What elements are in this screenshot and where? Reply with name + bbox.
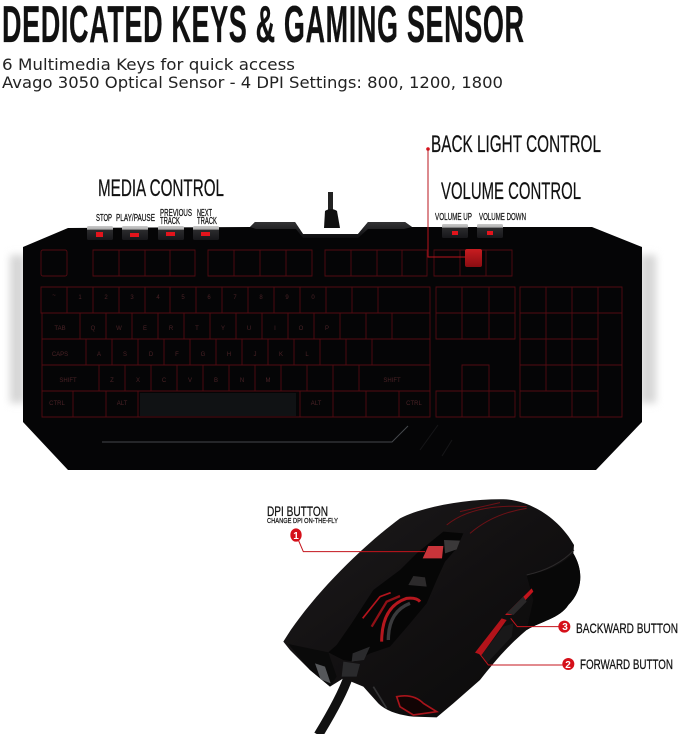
key legends: R bbox=[169, 326, 174, 332]
key legends: 6 bbox=[207, 295, 211, 301]
key legends: CTRL bbox=[49, 401, 65, 407]
key legends: SHIFT bbox=[383, 378, 401, 384]
key legends bbox=[49, 293, 422, 407]
key legends: SHIFT bbox=[59, 378, 77, 384]
callout numbers: 1 bbox=[293, 531, 299, 542]
key legends: Y bbox=[221, 326, 225, 332]
heading: volume control: VOLUME CONTROL bbox=[441, 178, 581, 205]
media button labels: PLAY/PAUSE bbox=[116, 213, 155, 224]
scroll wheel bbox=[363, 593, 420, 642]
key legends: 4 bbox=[156, 295, 160, 301]
key legends: S bbox=[123, 352, 127, 358]
key legends: L bbox=[305, 352, 309, 358]
key legends: 5 bbox=[181, 295, 185, 301]
key legends: 3 bbox=[130, 295, 134, 301]
key legends: A bbox=[97, 352, 101, 358]
volume buttons bbox=[442, 224, 503, 238]
keyboard cable bbox=[324, 192, 340, 228]
key grid bbox=[41, 250, 622, 417]
key legends: 8 bbox=[259, 295, 263, 301]
key legends: H bbox=[227, 352, 231, 358]
side buttons bbox=[475, 588, 533, 663]
key legends: B bbox=[214, 378, 218, 384]
callout 2 bbox=[479, 653, 574, 670]
key legends: V bbox=[188, 378, 192, 384]
space bar bbox=[140, 393, 296, 416]
key legends: D bbox=[149, 352, 154, 358]
label: dpi button: DPI BUTTON bbox=[267, 503, 328, 519]
key legends: TAB bbox=[54, 326, 66, 332]
key legends: U bbox=[247, 326, 251, 332]
key legends: W bbox=[116, 326, 122, 332]
callout numbers: 2 bbox=[565, 660, 571, 671]
button gap bbox=[328, 532, 463, 662]
key legends: N bbox=[240, 378, 244, 384]
key legends: 1 bbox=[78, 295, 82, 301]
key legends: M bbox=[266, 378, 270, 384]
key legends: C bbox=[162, 378, 167, 384]
media button labels: TRACK bbox=[160, 216, 180, 227]
media button labels: STOP bbox=[96, 213, 112, 224]
key legends: 7 bbox=[233, 295, 237, 301]
key legends: T bbox=[195, 326, 199, 332]
key legends: G bbox=[201, 352, 206, 358]
volume button labels: VOLUME DOWN bbox=[479, 212, 526, 223]
front underside bbox=[288, 644, 337, 687]
callout 3 bbox=[511, 618, 570, 633]
key legends: 0 bbox=[311, 295, 315, 301]
label: dpi button bbox=[267, 503, 338, 525]
key legends: ~ bbox=[52, 293, 56, 299]
key legends: CTRL bbox=[406, 401, 422, 407]
key legends: O bbox=[299, 326, 304, 332]
media button labels: PREVIOUS bbox=[160, 208, 192, 219]
media button labels: TRACK bbox=[197, 216, 217, 227]
mouse body bbox=[283, 499, 580, 717]
mouse cable bbox=[318, 677, 348, 734]
media button labels: NEXT bbox=[197, 208, 212, 219]
callout line: back light bbox=[426, 147, 466, 257]
keyboard body bbox=[23, 222, 642, 470]
key legends: Z bbox=[110, 378, 114, 384]
key legends: X bbox=[136, 378, 140, 384]
top red lines bbox=[447, 503, 527, 533]
media button labels bbox=[96, 208, 217, 227]
keyboard bbox=[10, 192, 656, 470]
key legends: I bbox=[274, 326, 276, 332]
key legends: P bbox=[325, 326, 329, 332]
callout numbers bbox=[293, 531, 571, 671]
callout numbers: 3 bbox=[562, 622, 568, 633]
key legends: Q bbox=[91, 326, 96, 332]
heading: media control: MEDIA CONTROL bbox=[98, 175, 224, 202]
key legends: CAPS bbox=[52, 352, 68, 358]
rear shade bbox=[527, 553, 580, 630]
key legends: ALT bbox=[117, 401, 128, 407]
subtitle text: Avago 3050 Optical Sensor - 4 DPI Settings: 800, 1200, 1800 bbox=[2, 73, 503, 92]
palm rest highlight bbox=[102, 426, 408, 442]
key legends: F bbox=[175, 352, 179, 358]
subtitle text bbox=[2, 55, 503, 92]
key legends: ALT bbox=[311, 401, 322, 407]
key legends: J bbox=[254, 352, 256, 358]
backlight key bbox=[465, 249, 482, 267]
label: dpi button: CHANGE DPI ON-THE-FLY bbox=[267, 516, 338, 525]
volume button labels bbox=[435, 212, 526, 223]
mouse bbox=[283, 499, 580, 734]
key legends: 2 bbox=[104, 295, 108, 301]
dpi button bbox=[423, 546, 443, 558]
front lower part bbox=[342, 647, 370, 677]
key legends: K bbox=[279, 352, 283, 358]
key legends: 9 bbox=[285, 295, 289, 301]
volume button labels: VOLUME UP bbox=[435, 212, 472, 223]
callout 1 bbox=[290, 528, 425, 552]
key legends: E bbox=[143, 326, 147, 332]
media buttons bbox=[87, 226, 219, 240]
subtitle text: 6 Multimedia Keys for quick access bbox=[2, 55, 295, 74]
